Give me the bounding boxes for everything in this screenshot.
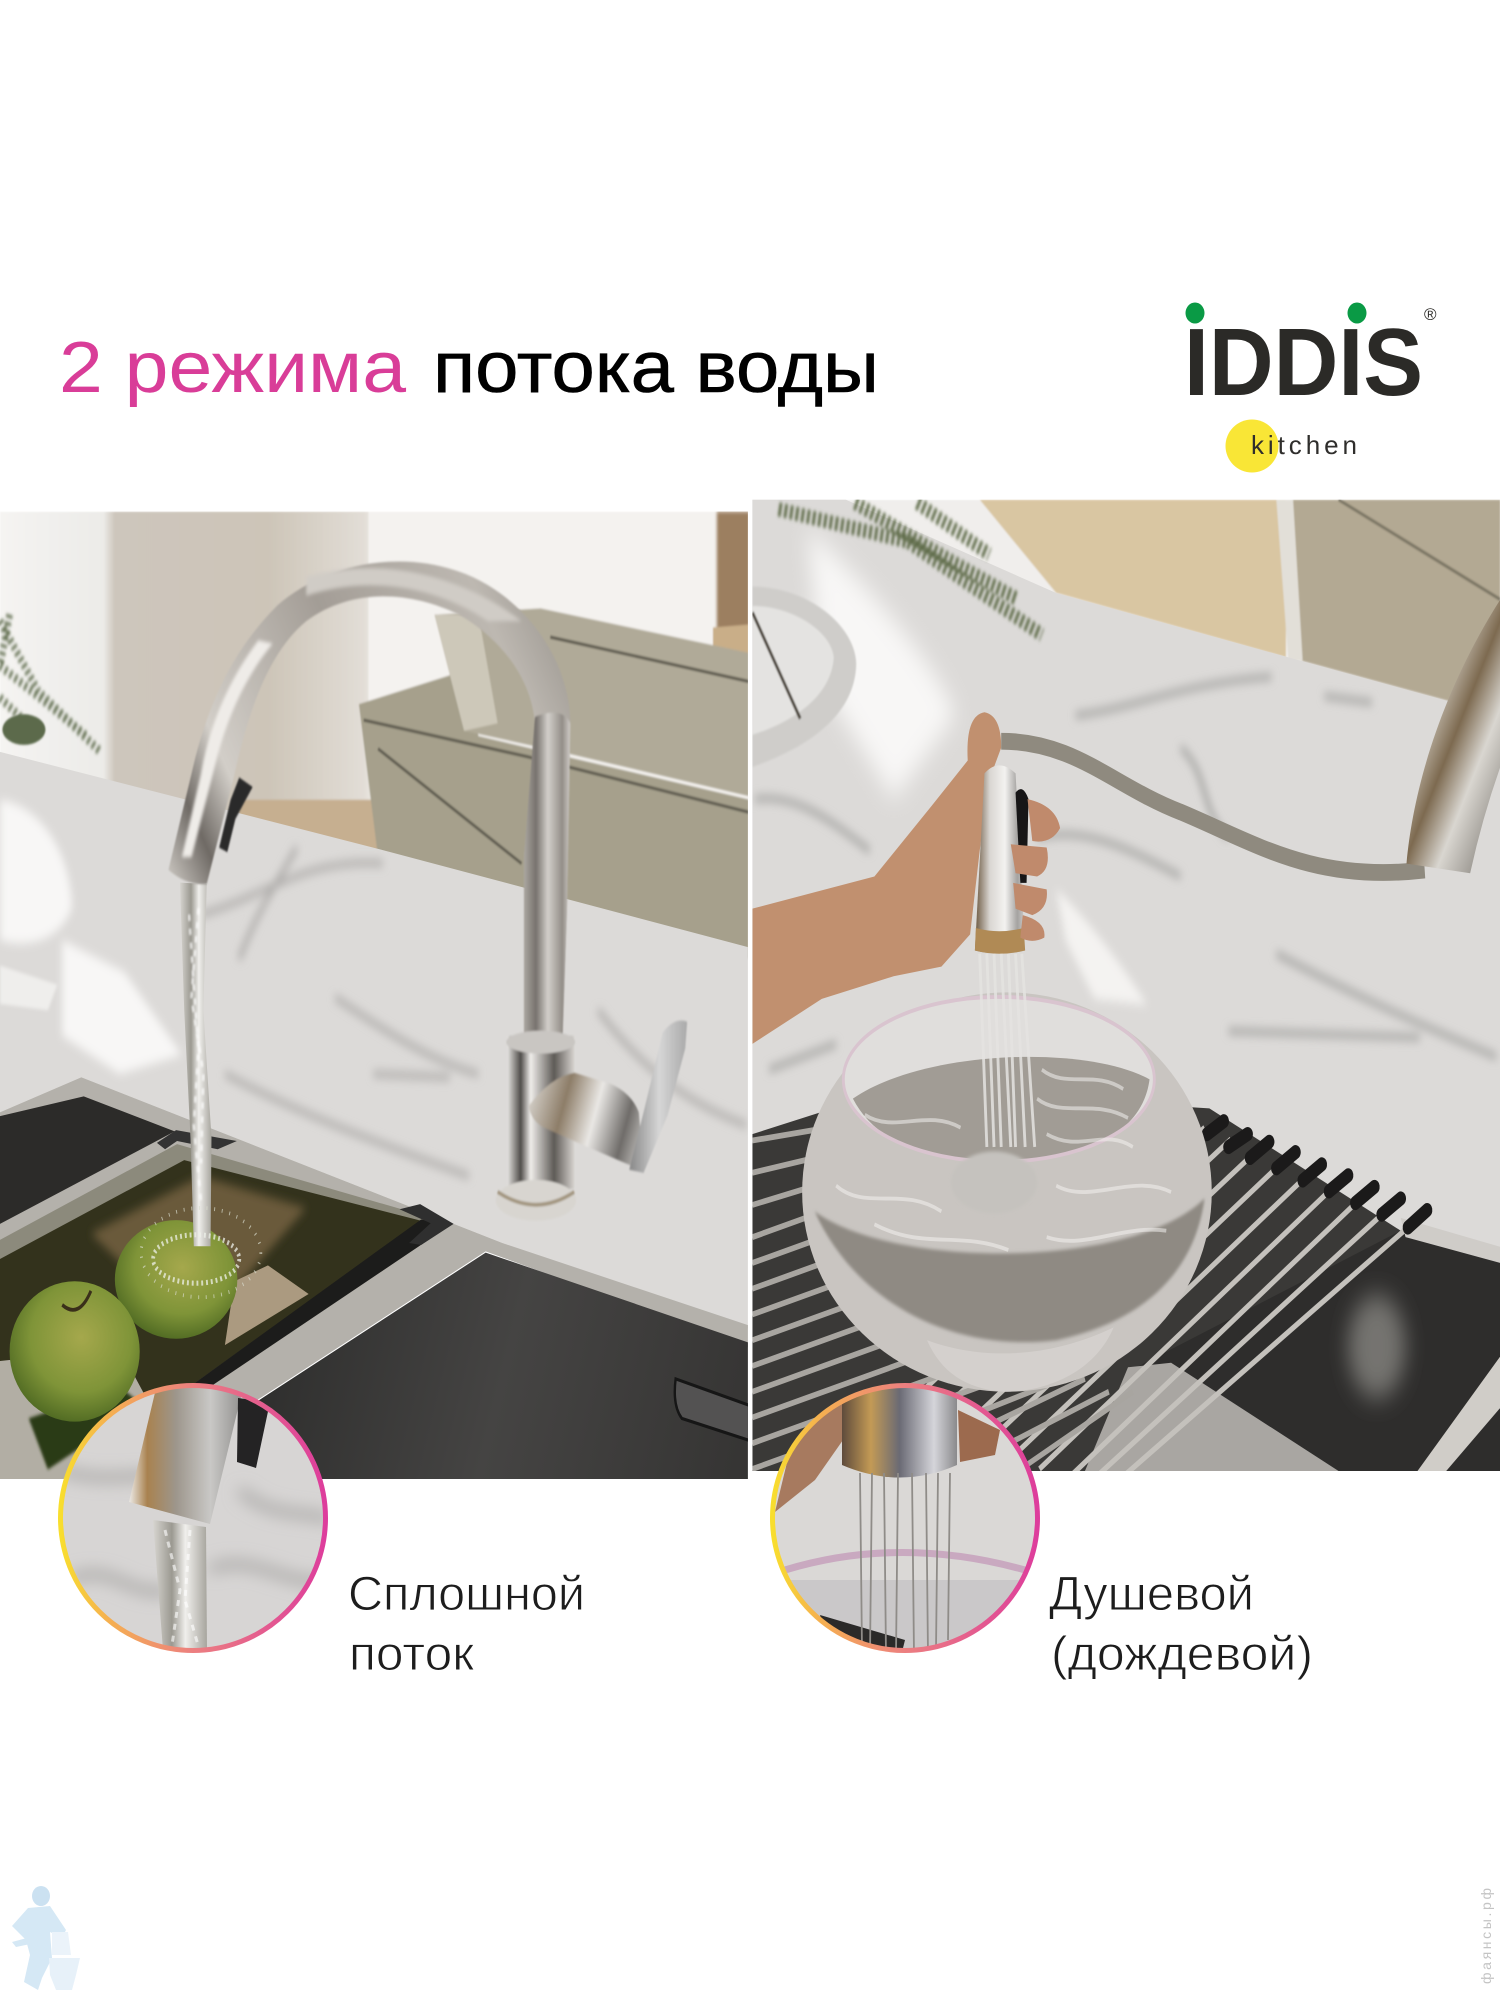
- room background: [848, 500, 1500, 701]
- leaf: [2, 714, 45, 745]
- panel: right photo, shower stream: [750, 500, 1500, 1481]
- panel: left photo, solid stream: [0, 511, 751, 1479]
- inset: solid stream nozzle: [55, 1380, 335, 1660]
- apple, front: [10, 1281, 140, 1422]
- apple, back: [115, 1220, 237, 1339]
- logo: IDDIS kitchen: IDDIS: [1184, 309, 1423, 416]
- right sink, dark: [1133, 1231, 1500, 1471]
- hand and arm: [752, 712, 1001, 1044]
- label: shower stream: [1049, 1568, 1313, 1681]
- label: solid stream: [348, 1568, 585, 1681]
- colander with apples: [0, 1130, 454, 1479]
- logo: IDDIS kitchen: [1184, 302, 1437, 472]
- shower head: [975, 765, 1028, 954]
- fern: [0, 615, 100, 752]
- label: shower stream: (дождевой): [1051, 1628, 1313, 1681]
- spray button: [219, 777, 253, 852]
- marble countertop: [0, 752, 750, 1329]
- title: [59, 328, 879, 408]
- faucet base: [507, 1036, 574, 1189]
- sink bowl, small left: [0, 1096, 175, 1224]
- title: потока воды: [433, 328, 879, 408]
- watermark: site name: фаянсы.рф: [1478, 1888, 1494, 1984]
- water stream: [141, 883, 261, 1297]
- spout end: [1407, 599, 1500, 873]
- sink logo plate: [675, 1379, 750, 1441]
- logo: IDDIS kitchen: kitchen: [1251, 430, 1357, 460]
- label: solid stream: Сплошной: [348, 1568, 585, 1621]
- glow in sink: [1348, 1295, 1406, 1398]
- lever handle: [529, 1073, 644, 1171]
- fingers: [1011, 799, 1060, 941]
- steel sink rim: [0, 1077, 750, 1479]
- rack dark area left: [752, 1089, 1401, 1471]
- room background: [0, 511, 751, 959]
- inset: shower stream nozzle: [770, 1380, 1040, 1660]
- rack rods, left group: [752, 1108, 1133, 1471]
- glass vase: [752, 587, 856, 767]
- shower streams: [980, 954, 1035, 1147]
- title: 2 режима: [59, 328, 407, 408]
- faucet: [168, 561, 687, 1221]
- watermark: plumber: [12, 1886, 80, 1990]
- label: solid stream: поток: [349, 1628, 475, 1681]
- glass bowl: [802, 992, 1212, 1392]
- fern: [779, 503, 1042, 635]
- sink bowl, right: [258, 1252, 748, 1479]
- label: shower stream: Душевой: [1049, 1568, 1254, 1621]
- rack end caps: [1207, 1121, 1427, 1227]
- marble countertop: [750, 500, 1500, 1263]
- flexible hose: [1001, 741, 1425, 873]
- drying rack rods: [908, 1128, 1415, 1481]
- steel rim and sink wall: [1085, 1218, 1500, 1471]
- logo: IDDIS kitchen: ®: [1424, 305, 1437, 324]
